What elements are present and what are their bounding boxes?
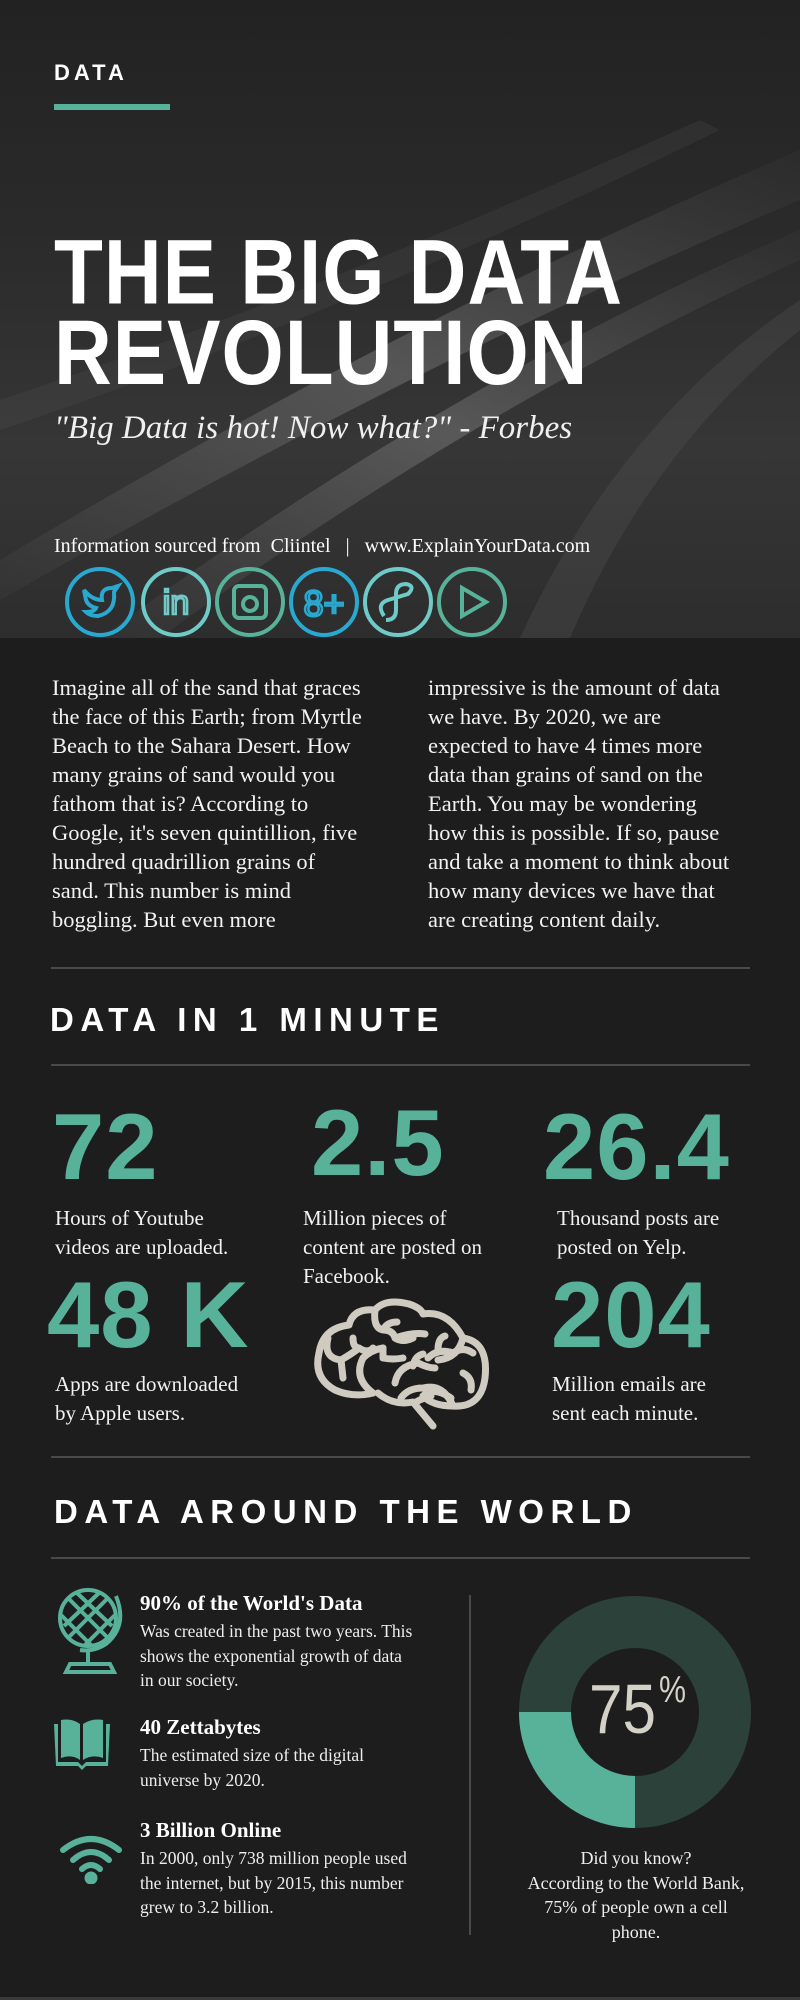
- item: 40 zettabytes: [140, 1715, 364, 1790]
- stat: 2.5: content are posted on: [303, 1235, 482, 1259]
- quote: "Big Data is hot! Now what?" - Forbes: [54, 410, 572, 446]
- stat: 26.4: posted on Yelp.: [557, 1235, 687, 1259]
- stat: 26.4: Thousand posts are: [557, 1206, 719, 1230]
- item: 3 billion online: grew to 3.2 billion.: [140, 1897, 274, 1917]
- icon: instagram: [217, 569, 283, 635]
- sources line: Information sourced from Cliintel | www.ExplainYourData.com: [54, 535, 590, 557]
- stat: 26.4: [543, 1094, 730, 1259]
- donut caption: [528, 1848, 744, 1942]
- intro text left: many grains of sand would you: [52, 762, 335, 787]
- item: 90% of the world's data: Was created in the past two years. This: [140, 1621, 412, 1641]
- stat: 204: [551, 1262, 711, 1425]
- intro text right: how many devices we have that: [428, 878, 715, 903]
- intro text left: the face of this Earth; from Myrtle: [52, 704, 362, 729]
- stat: 72: Hours of Youtube: [55, 1206, 204, 1230]
- item: 3 billion online: the internet, but by 2015, this number: [140, 1872, 403, 1892]
- intro text right: [428, 675, 729, 932]
- heading: data around the world: DATA AROUND THE WORLD: [54, 1493, 638, 1530]
- stat: 48 K: Apps are downloaded: [55, 1372, 238, 1396]
- icon: brain: [314, 1298, 489, 1430]
- intro text left: sand. This number is mind: [52, 878, 291, 903]
- item: 90% of the world's data: [140, 1591, 412, 1690]
- underline accent: [54, 104, 170, 110]
- stat: 48 K: [47, 1262, 250, 1425]
- intro text right: data than grains of sand on the: [428, 762, 703, 787]
- stat: 204: Million emails are: [552, 1372, 706, 1396]
- title: REVOLUTION: [54, 301, 588, 403]
- icon: play: [439, 569, 505, 635]
- stat: 2.5: Million pieces of: [303, 1206, 446, 1230]
- item: 40 zettabytes: universe by 2020.: [140, 1770, 265, 1790]
- item: 3 billion online: [140, 1818, 407, 1917]
- stat: 72: videos are uploaded.: [55, 1235, 228, 1259]
- icon: google plus: [291, 569, 357, 635]
- donut caption: phone.: [612, 1922, 660, 1942]
- item: 40 zettabytes: 40 Zettabytes: [140, 1715, 261, 1739]
- icon: wifi: [60, 1836, 122, 1884]
- item: 90% of the world's data: in our society.: [140, 1670, 238, 1690]
- intro text right: are creating content daily.: [428, 907, 660, 932]
- stat: 204: 204: [551, 1262, 711, 1367]
- title: THE BIG DATA: [54, 220, 623, 323]
- donut chart 75%: [519, 1596, 751, 1828]
- stat: 2.5: [303, 1090, 482, 1288]
- stat: 72: 72: [52, 1094, 159, 1199]
- item: 90% of the world's data: 90% of the World's Data: [140, 1591, 362, 1615]
- stat: 2.5: 2.5: [311, 1090, 445, 1195]
- icon: google plus: 8+: [303, 583, 345, 624]
- item: 3 billion online: In 2000, only 738 million people used: [140, 1848, 407, 1868]
- intro text left: Beach to the Sahara Desert. How: [52, 733, 351, 758]
- stat: 72: [52, 1094, 228, 1259]
- icon: twitter: [67, 569, 133, 635]
- icon: globe: [58, 1588, 122, 1674]
- hero background: [0, 0, 800, 638]
- icon: linkedin: [143, 569, 209, 635]
- intro text left: hundred quadrillion grains of: [52, 849, 315, 874]
- icon: link: [365, 569, 431, 635]
- item: 40 zettabytes: The estimated size of the digital: [140, 1745, 364, 1765]
- stat: 204: sent each minute.: [552, 1401, 698, 1425]
- intro text right: and take a moment to think about: [428, 849, 729, 874]
- icon: book: [54, 1720, 110, 1770]
- intro text right: we have. By 2020, we are: [428, 704, 661, 729]
- intro text left: Imagine all of the sand that graces: [52, 675, 361, 700]
- title: [54, 220, 623, 403]
- icon: linkedin: in: [163, 584, 189, 622]
- label: DATA: DATA: [54, 60, 128, 85]
- intro text right: impressive is the amount of data: [428, 675, 720, 700]
- stat: 26.4: 26.4: [543, 1094, 730, 1199]
- item: 3 billion online: 3 Billion Online: [140, 1818, 281, 1842]
- item: 90% of the world's data: shows the exponential growth of data: [140, 1646, 402, 1666]
- vertical divider: [469, 1595, 471, 1935]
- donut caption: 75% of people own a cell: [544, 1897, 728, 1917]
- stat: 2.5: Facebook.: [303, 1264, 390, 1288]
- intro text right: Earth. You may be wondering: [428, 791, 697, 816]
- heading: data in 1 minute: DATA IN 1 MINUTE: [50, 1001, 445, 1038]
- intro text left: boggling. But even more: [52, 907, 276, 932]
- intro text left: [52, 675, 362, 932]
- intro text right: how this is possible. If so, pause: [428, 820, 719, 845]
- donut chart 75%: %: [659, 1669, 686, 1711]
- donut chart 75%: 75: [589, 1670, 656, 1748]
- social icons: [65, 567, 507, 637]
- stat: 48 K: 48 K: [47, 1262, 250, 1367]
- donut caption: According to the World Bank,: [528, 1872, 744, 1892]
- intro text right: expected to have 4 times more: [428, 733, 702, 758]
- donut caption: Did you know?: [580, 1848, 692, 1868]
- intro text left: fathom that is? According to: [52, 791, 308, 816]
- stat: 48 K: by Apple users.: [55, 1401, 185, 1425]
- intro text left: Google, it's seven quintillion, five: [52, 820, 357, 845]
